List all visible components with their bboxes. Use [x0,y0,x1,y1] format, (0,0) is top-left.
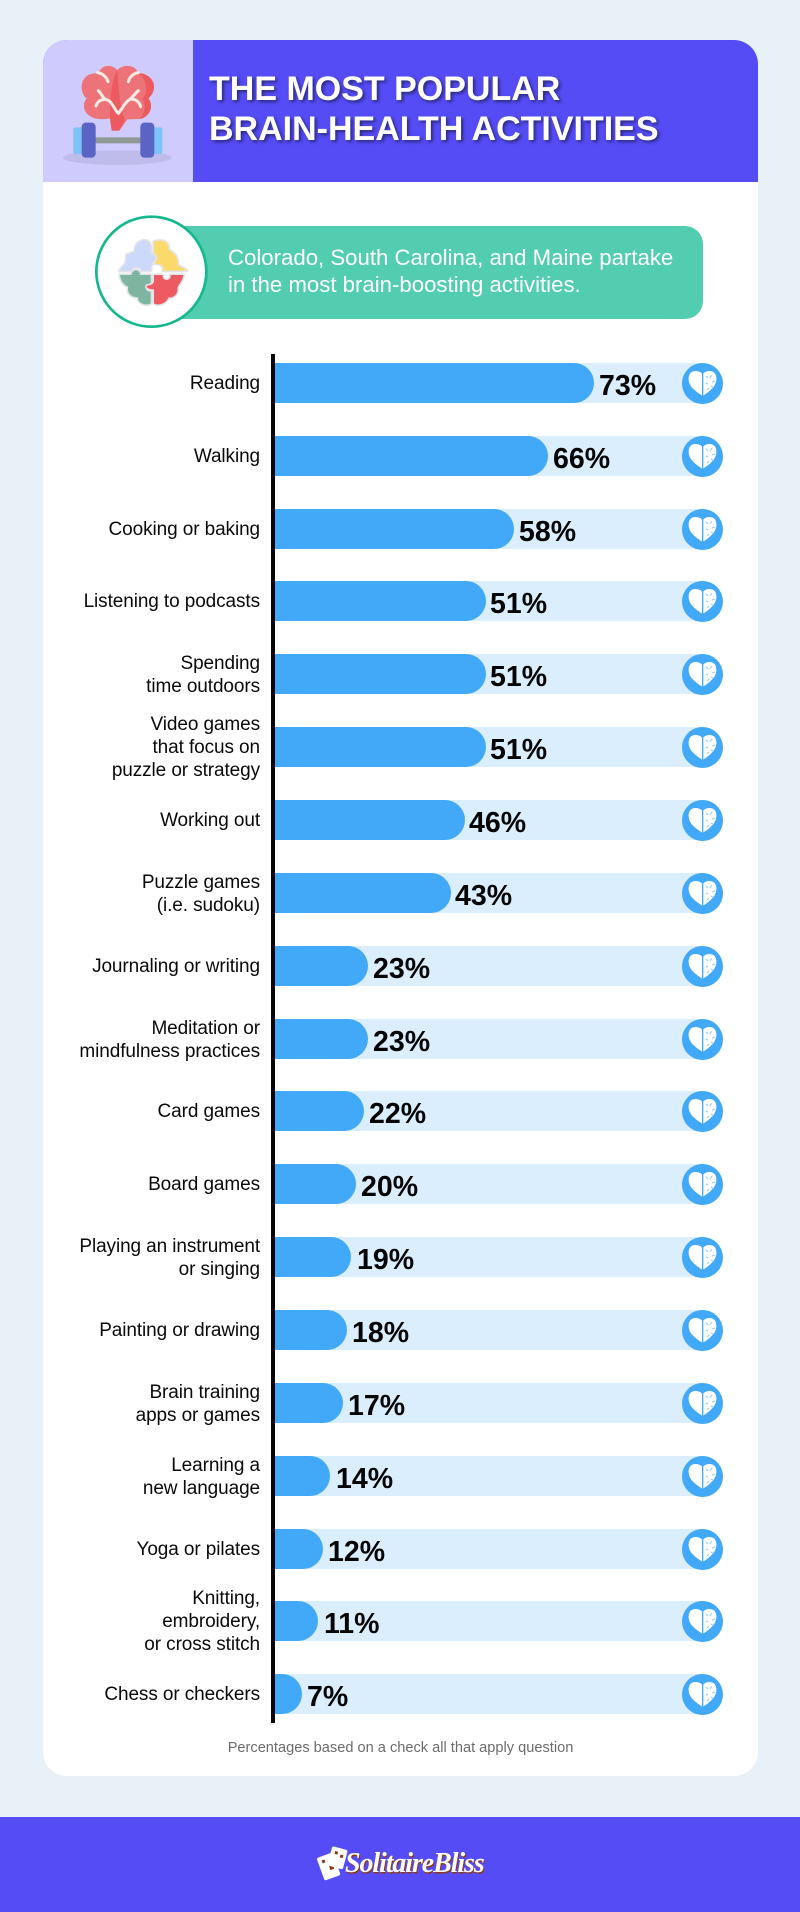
row: Meditation [79,1018,723,1062]
row: Brain training: 17% [348,1390,405,1422]
row: Board games: Board games [148,1174,260,1195]
logo wordmark: SolitaireBliss [345,1848,484,1879]
row: Spending time outdoors [146,652,723,696]
row: Video games: that focus on [152,737,260,758]
row: Listening to podcasts [84,581,723,622]
row: Video games [112,714,723,781]
row: Yoga or pilates [136,1529,723,1570]
row: Walking [194,436,723,477]
row: Listening to podcasts: Listening to podcasts [84,591,260,612]
icon: brain with dumbbell [63,66,172,165]
row: Reading: 73% [599,370,656,402]
row: Meditation: 23% [373,1026,430,1058]
row: Journaling or writing: 23% [373,953,430,985]
row: Chess or checkers: 7% [307,1681,348,1713]
row: Knitting: 11% [324,1608,379,1640]
title: BRAIN-HEALTH ACTIVITIES [209,110,659,148]
row: Board games [148,1164,723,1205]
row: Meditation: mindfulness practices [79,1040,260,1062]
footer band [0,1817,800,1912]
row: Listening to podcasts: 51% [490,588,547,620]
row: Puzzle games: (i.e. sudoku) [157,894,260,916]
row: Learning a new language: 14% [336,1463,393,1495]
row: Working out: Working out [160,810,260,831]
row: Yoga or pilates: Yoga or pilates [136,1539,260,1560]
callout text: in the most brain-boosting activities. [228,272,581,296]
bar chart: activities: puzzle or strategy [112,760,260,781]
callout text: Colorado, South Carolina, and Maine partake [228,245,673,270]
bar chart: activities [79,354,723,1723]
row: Playing an instrument: or singing [179,1258,260,1280]
row: Puzzle games: Puzzle games [142,872,260,892]
row: Brain training [136,1382,723,1426]
row: Painting or drawing: 18% [352,1317,409,1349]
title [209,70,662,148]
row: Painting or drawing: Painting or drawing [99,1320,260,1341]
row: Walking: Walking [194,446,260,467]
chart axis [271,354,275,1723]
row: Working out: 46% [469,807,526,839]
row: Playing an instrument: 19% [357,1244,414,1276]
icon: logo playing cards [317,1846,348,1880]
row: Brain training: Brain training [149,1382,260,1402]
row: Chess or checkers [104,1674,723,1715]
row: Cooking or baking: Cooking or baking [109,519,260,540]
bar chart: activities: Video games [151,714,260,735]
row: Yoga or pilates: 12% [328,1536,385,1568]
row: Learning a new language: new language [143,1478,260,1498]
row: Cooking or baking [109,509,723,550]
row: Spending time outdoors: time outdoors [146,676,260,696]
row: Working out [160,800,723,841]
row: Puzzle games [142,872,723,916]
row: Learning a new language [143,1454,723,1498]
row: Knitting: embroidery, [162,1611,260,1632]
title: THE MOST POPULAR [209,70,560,108]
callout text [228,245,673,296]
row: Journaling or writing [92,946,723,987]
row: Learning a new language: Learning a [171,1454,260,1476]
row: Brain training: apps or games [136,1404,260,1426]
row: Card games: Card games [158,1101,260,1122]
row: Reading [190,363,723,404]
bar chart: activities: or cross stitch [144,1634,260,1655]
row: Walking: 66% [553,443,610,475]
row: Reading: Reading [190,373,260,394]
row: Puzzle games: 43% [455,880,512,912]
row: Spending time outdoors: 51% [490,661,547,693]
row: Painting or drawing [99,1310,723,1351]
row: Card games [158,1091,723,1132]
callout: green banner [150,226,703,319]
row: Card games: 22% [369,1098,426,1130]
footnote: Percentages based on a check all that apply question [228,1740,573,1756]
bar chart: activities: Knitting, [192,1588,260,1609]
row: Board games: 20% [361,1171,418,1203]
row: Video games: 51% [490,734,547,766]
header banner [43,40,758,182]
row: Playing an instrument: Playing an instrument [79,1236,260,1256]
row: Spending time outdoors: Spending [180,652,260,674]
row: Knitting [144,1588,723,1655]
icon: puzzle brain in circle [95,215,208,328]
row: Playing an instrument [79,1236,723,1280]
row: Journaling or writing: Journaling or writing [92,956,260,977]
icon panel: brain lifting dumbbell [43,40,193,182]
row: Cooking or baking: 58% [519,516,576,548]
row: Meditation: Meditation or [151,1018,260,1038]
row: Chess or checkers: Chess or checkers [104,1684,260,1705]
